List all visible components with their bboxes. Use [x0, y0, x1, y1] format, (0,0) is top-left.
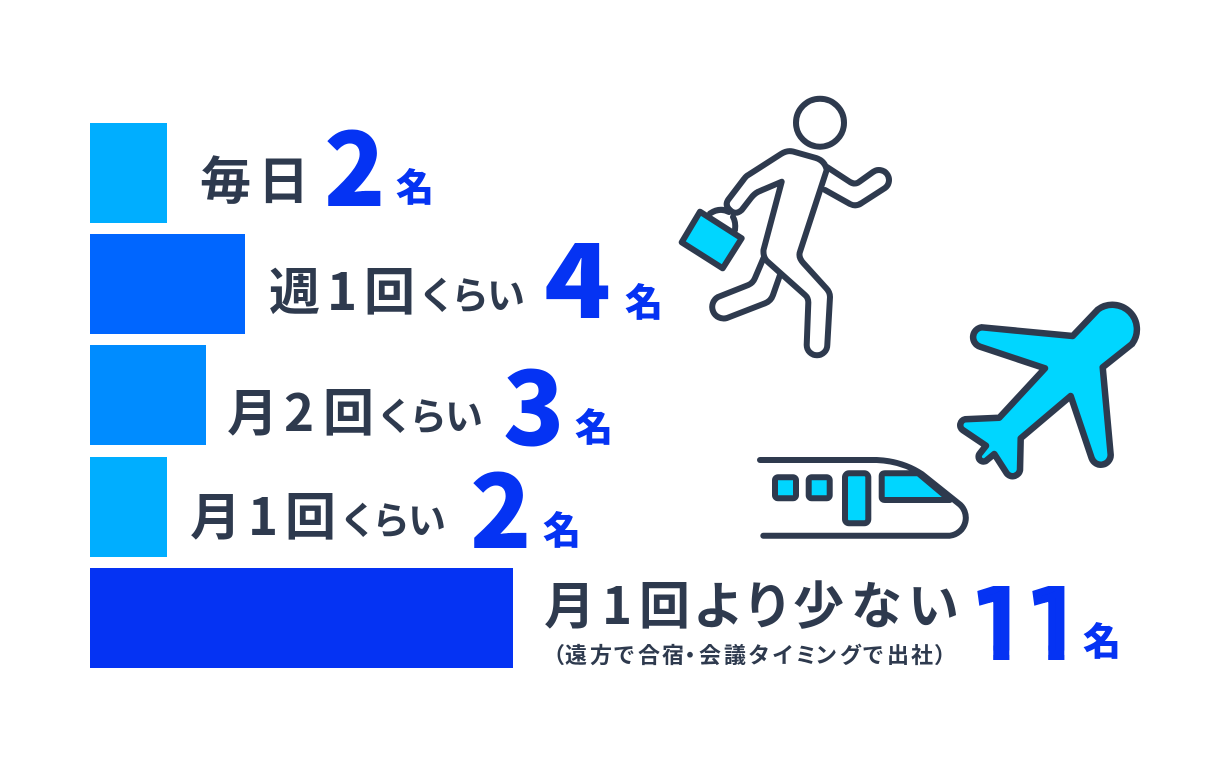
- row: less than monthly: [90, 568, 1118, 668]
- value: 2: 2: [470, 432, 532, 578]
- value: 3: 3: [503, 329, 565, 475]
- bar: weekly: [90, 234, 245, 334]
- icon: running businessperson: [682, 99, 889, 355]
- label: monthly: くらい: [339, 490, 446, 545]
- label: less than monthly: 月1回より少ない: [544, 565, 959, 639]
- row: monthly: [90, 432, 581, 578]
- label: twice a month: くらい: [376, 386, 483, 441]
- unit: 名: [1083, 611, 1121, 666]
- label: weekly: 週1回: [269, 251, 415, 325]
- bar: twice a month: [90, 345, 206, 445]
- row: daily: [90, 90, 434, 236]
- train door: [845, 473, 868, 523]
- bar: monthly: [90, 457, 167, 557]
- unit: 名: [396, 157, 434, 212]
- label: weekly: [269, 251, 525, 325]
- infographic: [90, 96, 1140, 668]
- unit: 名: [543, 500, 581, 555]
- label: twice a month: [227, 372, 483, 446]
- label: daily: 毎日: [200, 140, 309, 214]
- bar: daily: [90, 123, 167, 223]
- icon: bullet train: [760, 460, 966, 536]
- label: twice a month: 月2回: [227, 372, 374, 446]
- value: 11: 1: [972, 544, 1034, 690]
- label: weekly: くらい: [418, 265, 525, 320]
- train window 2: [809, 477, 830, 498]
- unit: 名: [575, 397, 613, 452]
- row: weekly: [90, 201, 663, 348]
- row: twice a month: [90, 329, 613, 475]
- briefcase: [682, 212, 742, 268]
- train window 1: [775, 477, 796, 498]
- value: 4: 4: [544, 201, 611, 348]
- value: 11: [977, 586, 1064, 660]
- note: （遠方で合宿・会議タイミングで出社）: [543, 638, 956, 670]
- icon: airplane: [960, 305, 1137, 476]
- unit: 名: [625, 272, 663, 327]
- train nose window: [882, 473, 950, 500]
- label: monthly: [190, 476, 446, 550]
- label: monthly: 月1回: [190, 476, 336, 550]
- bar: less than monthly: [90, 568, 513, 668]
- value: 2: 2: [324, 90, 386, 236]
- value: 11: 1: [1027, 544, 1089, 690]
